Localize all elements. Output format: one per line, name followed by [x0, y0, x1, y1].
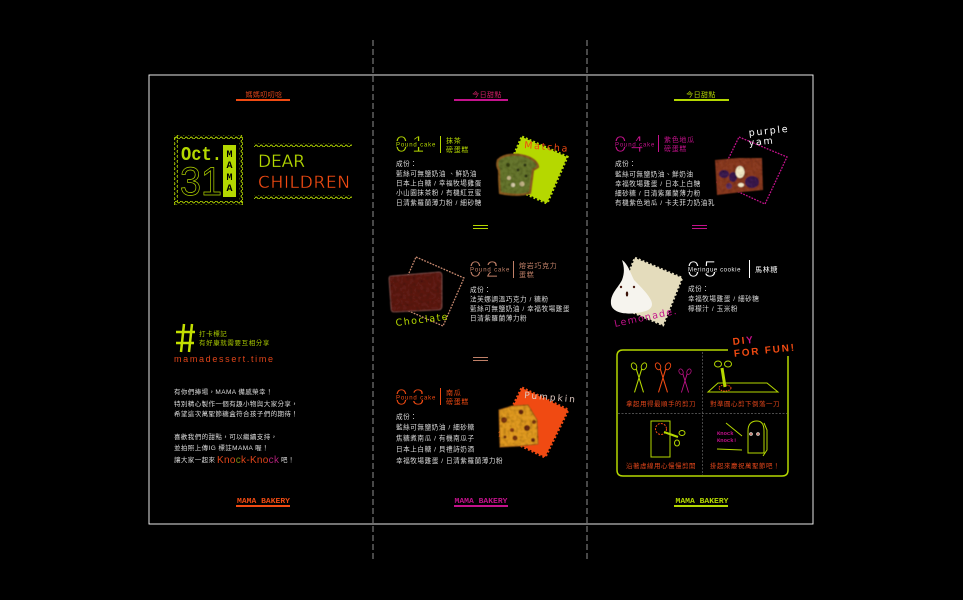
pumpkin stamp — [499, 388, 568, 457]
message text: 吧！ — [281, 456, 295, 464]
step 1 scissors — [630, 362, 692, 393]
step 4 illustration: Knock! — [717, 437, 737, 444]
heading: today dessert: 今日甜點 — [472, 90, 502, 99]
date stamp: M — [226, 173, 233, 184]
cake 01 header: 01 — [395, 131, 429, 157]
ingredients 03: 幸福牧場雞蛋 / 日清紫羅蘭薄力粉 — [396, 456, 503, 465]
cake 05 header: 05 — [687, 256, 721, 282]
cake 05 header: Meringue cookie — [688, 268, 741, 274]
step 2 caption: 對準圓心剪下倒落一刀 — [710, 399, 780, 408]
title: dear children: CHILDREN — [258, 173, 350, 193]
ingredients 02: 法芙娜調溫巧克力 / 糖粉 — [470, 294, 549, 304]
ingredients 04: 細砂糖 / 日清紫羅蘭薄力粉 — [615, 188, 701, 198]
matcha cake — [497, 155, 538, 195]
dividers — [618, 352, 787, 475]
step 1 caption: 拿起用得最順手的剪刀 — [626, 399, 696, 408]
panel: middle column — [389, 90, 577, 507]
logo: MAMA BAKERY — [237, 498, 291, 506]
date stamp: M — [226, 150, 233, 161]
heading: mama says — [236, 90, 290, 101]
label: purple yam — [748, 124, 790, 149]
date stamp: Oct. — [181, 144, 222, 166]
chocolate stamp — [395, 257, 464, 326]
message text: 喜歡我們的甜點，可以繼續支持， — [174, 432, 278, 441]
ingredients 02: 藍絲可無鹽奶油 / 幸福牧場雞蛋 — [470, 304, 570, 313]
hashtag note — [174, 329, 273, 364]
cake 02 header: Pound cake — [470, 268, 510, 274]
cake 02 header: 熔岩巧克力 — [519, 261, 558, 270]
cake 02 header: 蛋糕 — [519, 270, 534, 279]
ingredients 02: 日清紫羅蘭薄力粉 — [470, 314, 527, 322]
label: matcha: Matcha — [524, 140, 570, 155]
ingredients 04: 幸福牧場雞蛋 / 日本上白糖 — [615, 179, 701, 188]
title: diy for fun — [732, 331, 796, 360]
title: diy for fun: FOR FUN! — [733, 342, 796, 360]
cake 04 header: 磅蛋糕 — [664, 144, 687, 153]
message text: 特別精心製作一個有趣小物與大家分享， — [174, 399, 298, 408]
cake 01 header — [394, 131, 469, 157]
cake 03 header: 03 — [395, 384, 429, 410]
date stamp — [174, 135, 243, 205]
message text: 並拍照上傳IG 標註MAMA 喔！ — [174, 443, 269, 452]
cake 02 header: 02 — [469, 256, 503, 282]
divider 1 — [473, 225, 488, 229]
ingredients 01: 藍絲可無鹽奶油 、鮮奶油 — [396, 169, 477, 178]
hashtag note: mamadessert.time — [174, 354, 273, 364]
fold line right — [586, 40, 588, 560]
message text: Knock-Knock — [217, 455, 280, 466]
logo: MAMA BAKERY — [454, 498, 508, 506]
divider 2 — [473, 357, 488, 361]
cake 04 header — [613, 131, 695, 157]
cake 01 header: 抹茶 — [446, 136, 461, 145]
step 2 illustration — [708, 361, 778, 392]
cake 05 header — [686, 256, 778, 282]
ingredients 04 — [615, 159, 715, 207]
ingredients 02: 成份： — [470, 285, 491, 294]
date stamp: A — [226, 161, 233, 172]
step 4 illustration: Knock — [717, 430, 734, 437]
pumpkin cake — [499, 405, 538, 447]
ingredients 02 — [470, 285, 570, 322]
cake 02 header — [468, 256, 558, 282]
ingredients 05: 檸檬汁 / 玉米粉 — [688, 304, 738, 313]
ingredients 03: 成份： — [396, 412, 417, 421]
ingredients 01: 日本上白糖 / 幸福牧場雞蛋 — [396, 178, 482, 188]
cake 01 header: 磅蛋糕 — [446, 145, 469, 154]
label: lemonade: Lemonade. — [613, 306, 679, 330]
title: diy for fun: DIY — [732, 335, 755, 348]
message text: 讓大家一起來 — [174, 455, 215, 464]
ingredients 01: 成份： — [396, 159, 417, 168]
lemonade stamp — [616, 258, 682, 325]
step 3 illustration — [651, 421, 685, 457]
ingredients 04: 有機紫色地瓜 / 卡夫菲力奶油乳 — [615, 198, 715, 207]
meringue — [611, 260, 652, 314]
label: purple yam: yam — [748, 135, 775, 149]
message text — [174, 387, 298, 466]
step 3 caption: 沿著虛線用心慢慢剪開 — [626, 461, 696, 470]
message text: 有你們捧場，MAMA 備感榮幸！ — [174, 387, 273, 396]
label: choclate: Choclate — [395, 312, 450, 329]
heading: mama says: 媽媽叨叨唸 — [246, 90, 282, 99]
ingredients 03: 日本上白糖 / 貝禮詩奶酒 — [396, 444, 475, 454]
ingredients 03: 焦糖煮南瓜 / 有機南瓜子 — [396, 434, 475, 442]
label: pumpkin: Pumpkin — [524, 391, 577, 406]
ingredients 05 — [688, 284, 759, 313]
heading: today dessert — [454, 90, 508, 101]
heading: today dessert — [674, 90, 729, 101]
cake 03 header: 磅蛋糕 — [446, 397, 469, 406]
panel: right column — [611, 90, 796, 507]
panel outline — [617, 350, 788, 476]
step 4 caption: 掛起來慶祝萬聖節吧！ — [710, 461, 780, 470]
panel: DIY — [617, 331, 796, 476]
purple yam stamp — [717, 137, 787, 204]
date stamp: 31 — [180, 160, 222, 204]
cake 03 header: Pound cake — [396, 396, 436, 402]
cake 03 header: 南瓜 — [446, 388, 461, 397]
hashtag note: 有好康就需要互相分享 — [199, 338, 270, 347]
cake 01 header: Pound cake — [396, 142, 436, 148]
icon: hash — [176, 324, 195, 352]
title: dear children: DEAR — [258, 152, 305, 172]
ingredients 03: 藍絲可無鹽奶油 / 細砂糖 — [396, 422, 475, 432]
ingredients 01 — [396, 159, 482, 207]
divider 4 — [692, 225, 707, 229]
hashtag note: 打卡標記 — [199, 329, 227, 338]
yam cake — [715, 158, 763, 195]
ingredients 04: 藍絲可無鹽奶油、鮮奶油 — [615, 170, 694, 178]
title: dear children — [254, 143, 352, 199]
logo: MAMA BAKERY — [676, 498, 729, 506]
cake 03 header — [394, 384, 469, 410]
ingredients 04: 成份： — [615, 159, 636, 168]
ingredients 05: 幸福牧場雞蛋 / 細砂糖 — [688, 294, 759, 303]
step 4 illustration — [717, 421, 767, 456]
ingredients 03 — [396, 412, 503, 465]
date stamp: A — [226, 184, 233, 195]
label: purple yam: purple — [748, 124, 790, 139]
cake 05 header: 馬林糖 — [755, 265, 778, 274]
cake 04 header: 紫色地瓜 — [664, 135, 695, 144]
ingredients 01: 小山園抹茶粉 / 有機紅豆蜜 — [396, 188, 482, 197]
frame — [149, 75, 813, 524]
heading: today dessert: 今日甜點 — [686, 90, 716, 99]
ingredients 05: 成份： — [688, 284, 709, 293]
ingredients 01: 日清紫羅蘭薄力粉 / 細砂糖 — [396, 198, 482, 207]
chocolate cake — [389, 272, 442, 312]
fold line left — [372, 40, 374, 560]
panel: left column — [174, 90, 352, 507]
message text: 希望這次萬聖節糖盒符合孩子們的期待！ — [174, 409, 298, 418]
matcha stamp — [502, 137, 567, 203]
cake 04 header: 04 — [614, 131, 648, 157]
cake 04 header: Pound cake — [615, 142, 655, 148]
